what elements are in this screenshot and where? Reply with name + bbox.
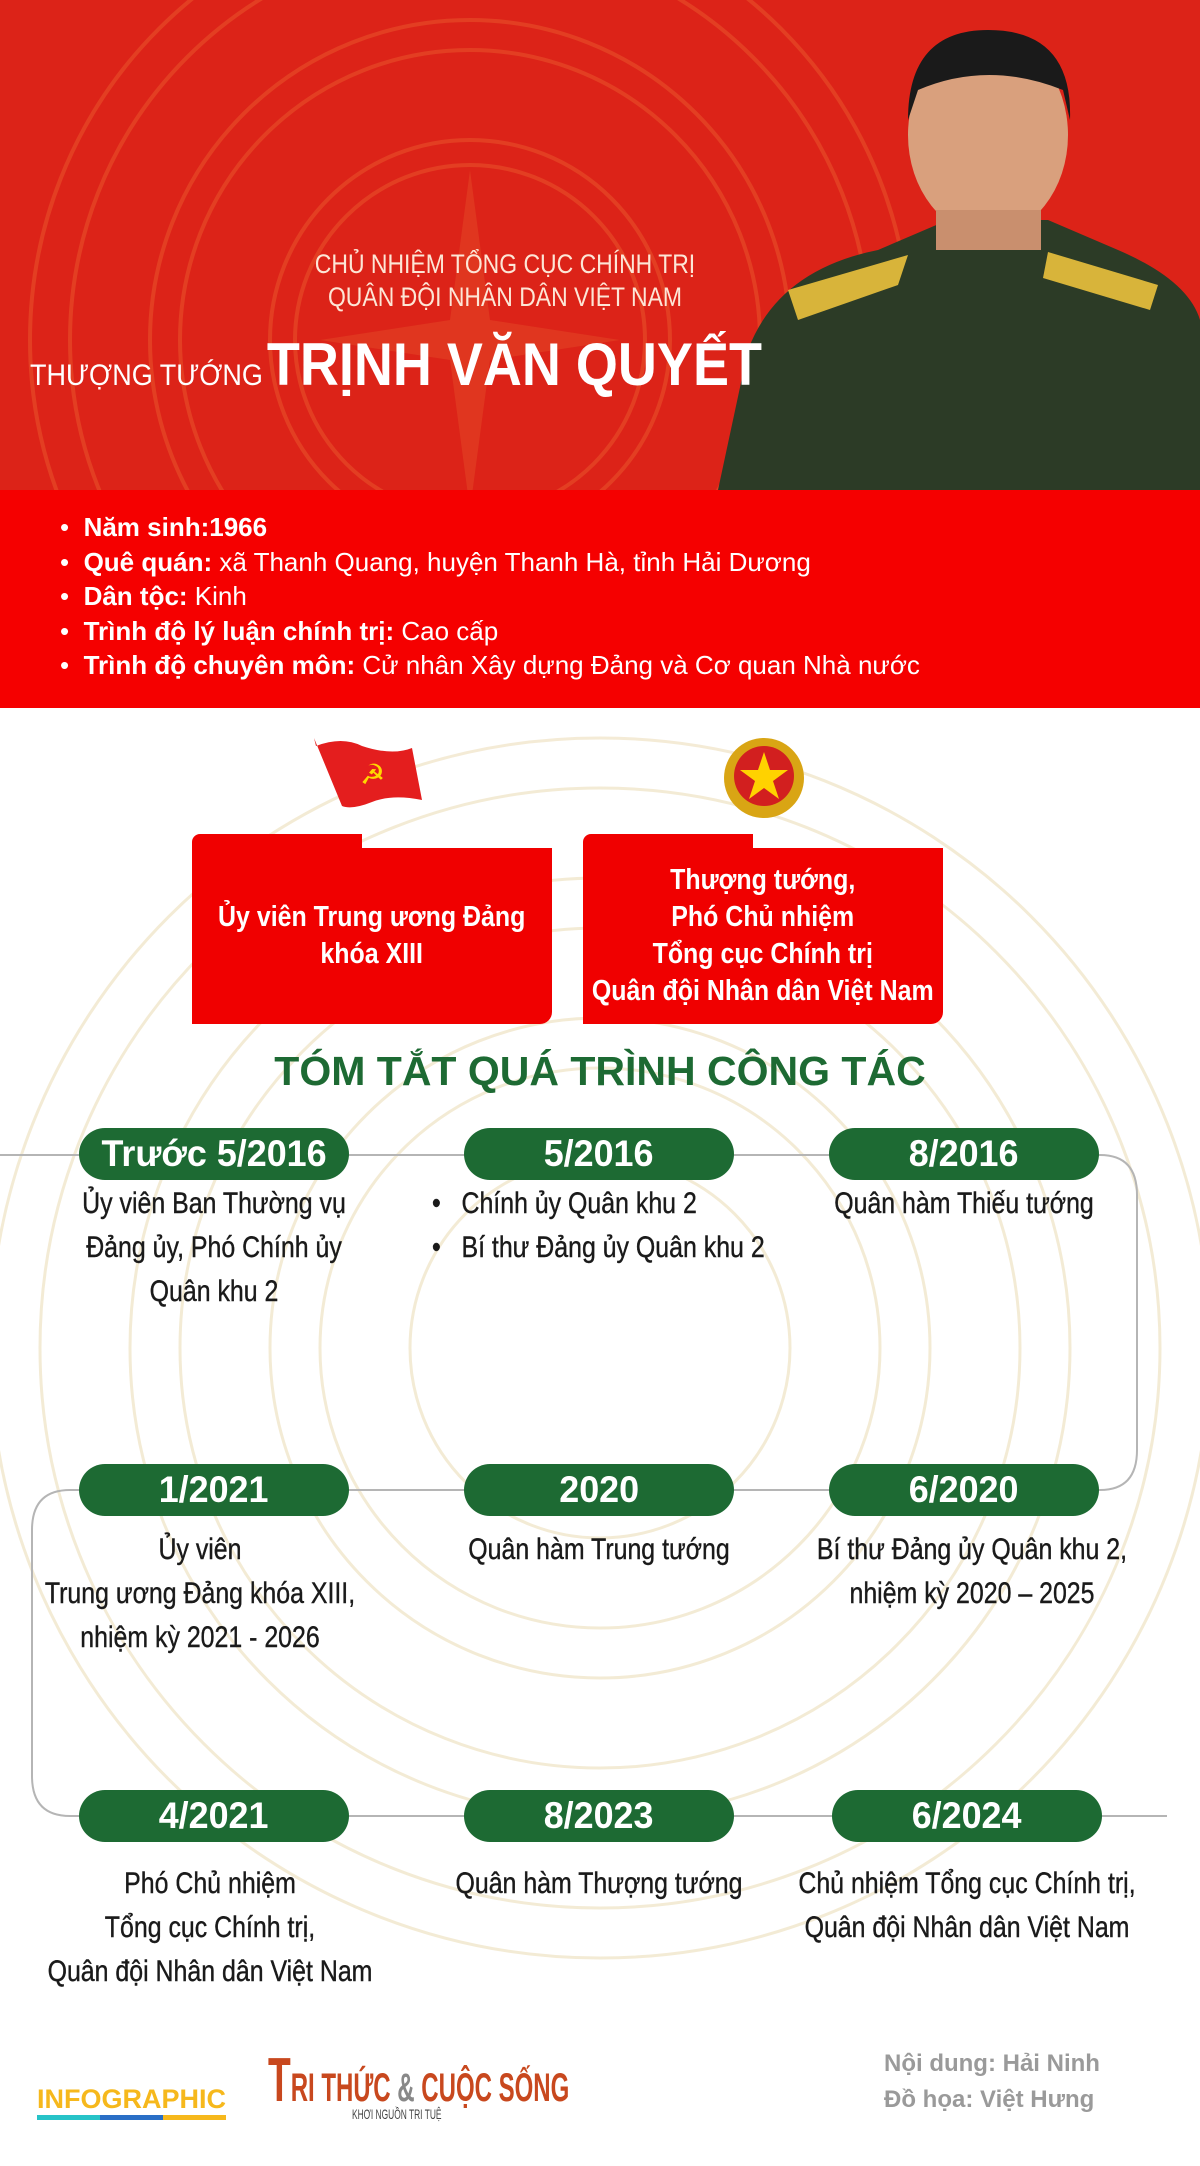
text: Phó Chủ nhiệm — [124, 1867, 296, 1900]
text: Quân đội Nhân dân Việt Nam — [48, 1955, 372, 1988]
timeline: Quân hàm Trung tướng — [468, 1533, 730, 1566]
timeline item: 6/2020: 6/2020 — [909, 1469, 1019, 1510]
timeline item: before 5/2016: Trước 5/2016 — [101, 1133, 327, 1174]
footer: infographic label: INFOGRAPHIC — [37, 2084, 226, 2114]
timeline item: 2020 — [464, 1464, 734, 1516]
timeline: • Bí thư Đảng ủy Quân khu 2 — [432, 1231, 765, 1264]
timeline — [45, 1128, 1136, 1988]
timeline item: 6/2024: 6/2024 — [912, 1795, 1022, 1836]
timeline item: 1/2021: 1/2021 — [159, 1469, 269, 1510]
timeline: nhiệm kỳ 2020 – 2025 — [849, 1577, 1095, 1610]
box: rank: Phó Chủ nhiệm — [672, 901, 854, 933]
background drum pattern — [0, 736, 1200, 1960]
footer: credits — [884, 2050, 1100, 2113]
timeline item: 4/2021: 4/2021 — [159, 1795, 269, 1836]
header subtitle: QUÂN ĐỘI NHÂN DÂN VIỆT NAM — [328, 282, 682, 312]
timeline item: 4/2021 — [79, 1790, 349, 1842]
timeline: Quân khu 2 — [150, 1275, 278, 1308]
header panel — [0, 0, 1200, 490]
timeline: Đảng ủy, Phó Chính ủy — [86, 1231, 342, 1264]
info band: • Dân tộc: Kinh — [60, 581, 247, 611]
timeline: • Chính ủy Quân khu 2 — [432, 1187, 697, 1220]
timeline item: 5/2016: 5/2016 — [544, 1133, 654, 1174]
footer: credits: Nội dung: Hải Ninh — [884, 2050, 1100, 2077]
box: rank — [583, 848, 943, 1024]
section title: TÓM TẮT QUÁ TRÌNH CÔNG TÁC — [274, 1048, 926, 1094]
box: party committee: khóa XIII — [321, 938, 423, 970]
info band: • Năm sinh:1966 — [60, 512, 267, 542]
portrait photo — [718, 30, 1200, 490]
footer: logo: KHƠI NGUỒN TRI TUỆ — [352, 2106, 442, 2122]
icon: party flag — [314, 738, 422, 808]
timeline: Ủy viên Ban Thường vụ — [82, 1187, 346, 1220]
timeline: Ủy viên — [158, 1533, 242, 1566]
header subtitle: CHỦ NHIỆM TỔNG CỤC CHÍNH TRỊ — [315, 249, 695, 279]
footer: logo: TRI THỨC & CUỘC SỐNG — [268, 2046, 569, 2115]
box: rank: Quân đội Nhân dân Việt Nam — [592, 975, 934, 1007]
timeline item: 1/2021 — [79, 1464, 349, 1516]
box: rank: Tổng cục Chính trị — [653, 938, 873, 970]
timeline item: before 5/2016 — [79, 1128, 349, 1180]
text: Quân đội Nhân dân Việt Nam — [805, 1911, 1129, 1944]
timeline: Trung ương Đảng khóa XIII, — [45, 1577, 355, 1610]
info band: • Trình độ chuyên môn: Cử nhân Xây dựng Đảng và Cơ quan Nhà nước — [60, 650, 920, 680]
info band — [0, 490, 1200, 708]
timeline: Bí thư Đảng ủy Quân khu 2, — [817, 1533, 1127, 1566]
timeline: Quân hàm Thiếu tướng — [834, 1187, 1094, 1220]
timeline item: 8/2016 — [829, 1128, 1099, 1180]
header subtitle — [315, 249, 695, 312]
header name: THƯỢNG TƯỚNG TRỊNH VĂN QUYẾT — [30, 331, 762, 398]
icon: party flag: ☭ — [360, 758, 385, 791]
timeline item: 6/2020 — [829, 1464, 1099, 1516]
box: party committee: Ủy viên Trung ương Đảng — [218, 901, 526, 933]
timeline item: 8/2023 — [464, 1790, 734, 1842]
timeline item: 8/2016: 8/2016 — [909, 1133, 1019, 1174]
info band: • Quê quán: xã Thanh Quang, huyện Thanh Hà, tỉnh Hải Dương — [60, 546, 811, 576]
text: Chủ nhiệm Tổng cục Chính trị, — [798, 1867, 1136, 1900]
box: rank: Thượng tướng, — [670, 864, 856, 896]
timeline item: 2020: 2020 — [559, 1469, 639, 1510]
info band: • Trình độ lý luận chính trị: Cao cấp — [60, 616, 498, 646]
icon: army emblem — [724, 738, 804, 818]
text: Quân hàm Thượng tướng — [455, 1867, 743, 1900]
timeline item: 5/2016 — [464, 1128, 734, 1180]
footer: credits: Đồ họa: Việt Hưng — [884, 2086, 1094, 2113]
timeline: nhiệm kỳ 2021 - 2026 — [80, 1621, 320, 1654]
text: Tổng cục Chính trị, — [105, 1911, 315, 1944]
timeline connector — [0, 1154, 1167, 1817]
timeline item: 6/2024 — [832, 1790, 1102, 1842]
box: party committee — [192, 848, 552, 1024]
timeline item: 8/2023: 8/2023 — [544, 1795, 654, 1836]
